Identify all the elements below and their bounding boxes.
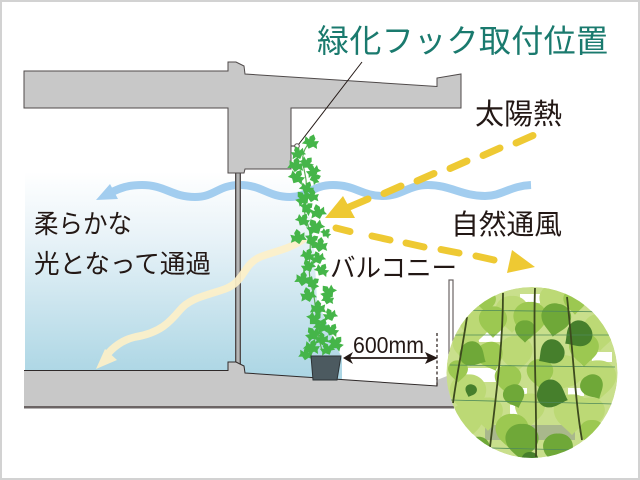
label: soft light: 柔らかな [34, 209, 132, 239]
photo: green curtain leaves [446, 284, 618, 470]
arrow: solar heat dashed [325, 136, 533, 218]
label: passes as light: 光となって通過 [34, 249, 211, 279]
arrow: breeze wave [96, 184, 531, 200]
dimension: 600mm [343, 332, 438, 386]
glass door [235, 172, 241, 364]
arrow: reflected heat dashed [336, 228, 535, 273]
arrow: soft light [96, 238, 305, 369]
title: hook position: 緑化フック取付位置 [317, 23, 608, 59]
upper slab and beam [24, 62, 461, 173]
interior light gradient [25, 172, 342, 385]
label: natural ventilation: 自然通風 [451, 209, 562, 240]
label: solar heat: 太陽熱 [475, 98, 562, 131]
plant pot [311, 356, 341, 380]
climbing ivy plant [286, 132, 347, 362]
leader line to hook [291, 62, 362, 148]
label: balcony: バルコニー [330, 253, 457, 283]
lower slab [24, 362, 460, 408]
balcony wall [449, 280, 453, 380]
label: 600mm: 600mm [353, 332, 424, 358]
